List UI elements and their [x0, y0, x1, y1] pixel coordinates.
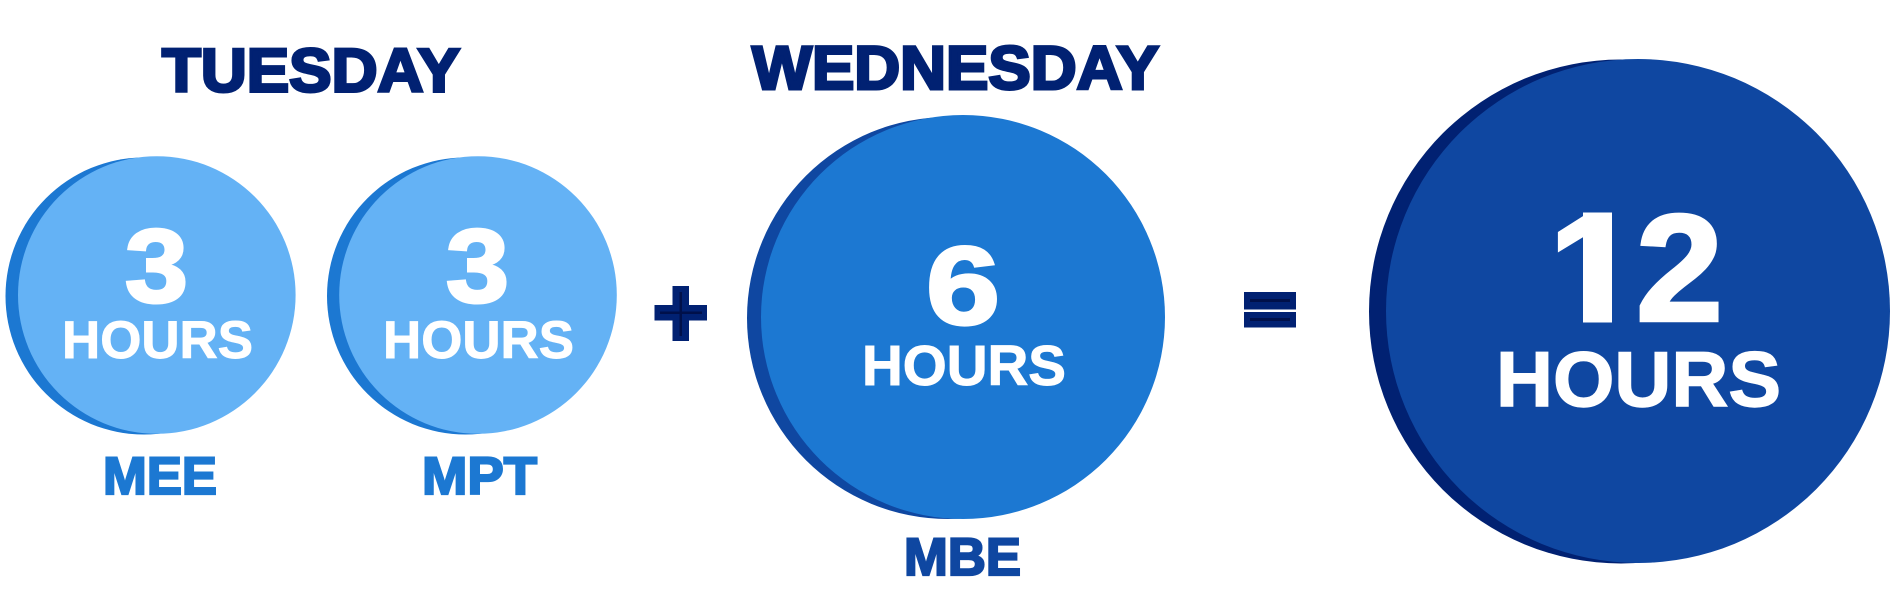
number: 6: 6 — [926, 224, 1000, 348]
panel: MEE 3 hours circle — [6, 156, 296, 434]
panel: total 12 hours circle — [1369, 59, 1890, 564]
label: MBE: MBE — [904, 528, 1021, 587]
heading: Tuesday: TUESDAY — [162, 36, 460, 104]
label: hours: HOURS — [1496, 335, 1781, 423]
number: 12: 12 — [1549, 184, 1723, 354]
circle disc: total — [1369, 59, 1890, 564]
label: hours: HOURS — [862, 334, 1066, 398]
circle disc: MPT — [327, 156, 617, 434]
icon: equals sign — [1244, 292, 1296, 328]
label: MPT: MPT — [422, 447, 537, 506]
heading: Wednesday: WEDNESDAY — [752, 34, 1159, 102]
circle disc: MBE — [747, 115, 1165, 519]
icon: plus sign — [654, 286, 707, 341]
panel: MBE 6 hours circle — [747, 115, 1165, 519]
label: hours: HOURS — [383, 311, 574, 370]
numeral 1 foot shaping — [1552, 212, 1637, 326]
number: 3: 3 — [125, 209, 188, 325]
label: MEE: MEE — [103, 447, 217, 506]
panel: MPT 3 hours circle — [327, 156, 617, 434]
circle disc: MEE — [6, 156, 296, 434]
label: hours: HOURS — [62, 311, 253, 370]
number: 3: 3 — [446, 209, 509, 325]
